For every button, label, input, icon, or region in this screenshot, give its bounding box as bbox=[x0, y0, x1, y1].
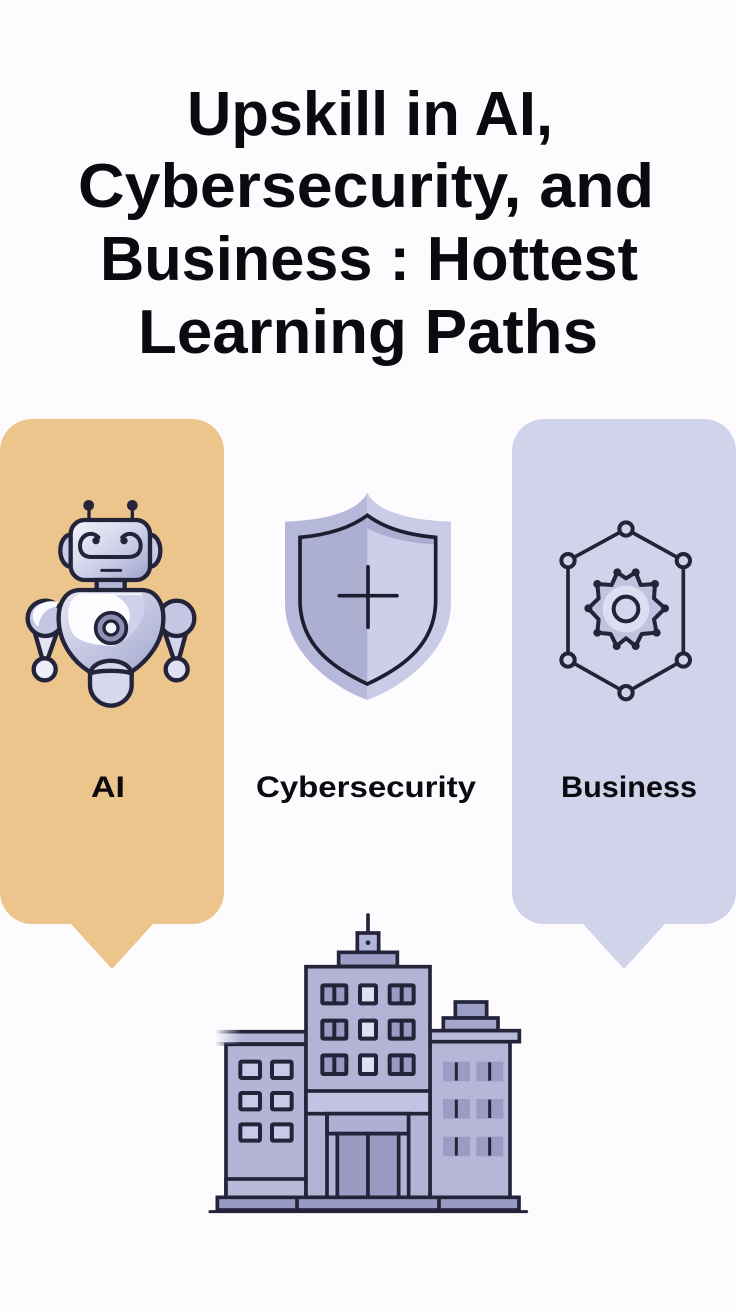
title: Business : Hottest bbox=[100, 225, 638, 294]
panel: AI bbox=[0, 419, 224, 969]
title: Learning Paths bbox=[138, 298, 598, 367]
title: Upskill in AI, bbox=[187, 80, 553, 149]
title bbox=[78, 80, 654, 367]
panel: Cybersecurity bbox=[256, 493, 476, 804]
panel: Business bbox=[512, 419, 736, 969]
icon: office building bbox=[210, 915, 527, 1212]
icon: gear network bbox=[561, 522, 690, 699]
AI speech bubble background bbox=[0, 419, 224, 969]
label: AI: AI bbox=[91, 771, 125, 804]
icon: robot bbox=[28, 500, 194, 706]
center tower windows bbox=[322, 985, 414, 1074]
title: Cybersecurity, and bbox=[78, 152, 654, 221]
label: Business: Business bbox=[561, 771, 697, 804]
Business speech bubble background bbox=[512, 419, 736, 969]
icon: shield bbox=[285, 493, 451, 700]
label: Cybersecurity: Cybersecurity bbox=[256, 771, 476, 804]
